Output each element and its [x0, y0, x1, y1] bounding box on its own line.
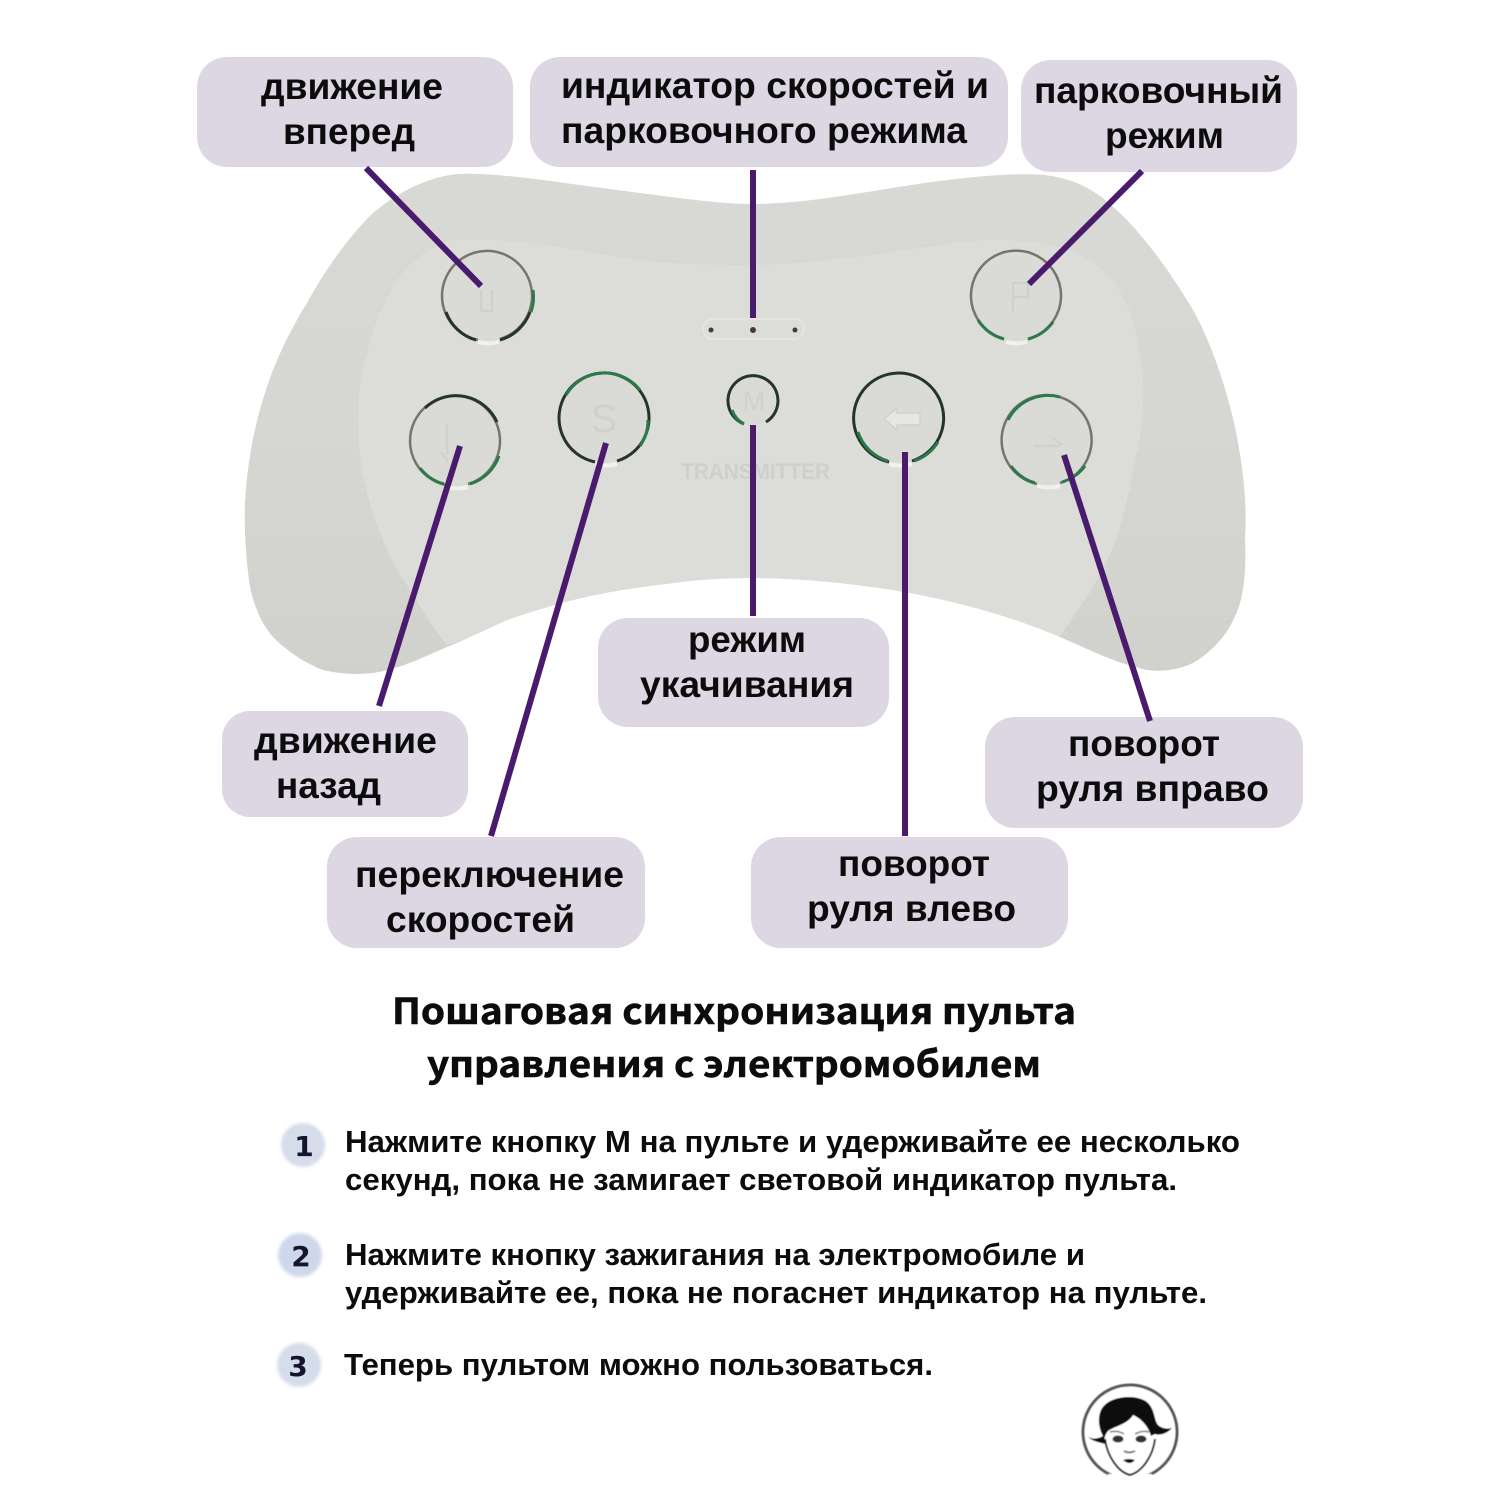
button: mode M: [728, 375, 779, 425]
step 1: [281, 1123, 1240, 1197]
callout: forward: [197, 57, 513, 167]
callout: rocking mode: [598, 618, 889, 727]
callout: steer left: поворот: [838, 843, 990, 884]
callout: indicator: [530, 57, 1008, 167]
button: parking: [971, 251, 1061, 344]
step 2: [278, 1233, 1207, 1310]
callout: backward: назад: [276, 765, 381, 806]
remote texture: [245, 174, 1246, 674]
callout: parking: режим: [1105, 115, 1224, 156]
callout: backward: [222, 711, 468, 817]
step 1 badge: 1: [294, 1130, 314, 1163]
button: speed: S: [591, 397, 617, 441]
step 3 badge: 3: [288, 1350, 308, 1383]
callout: rocking mode: укачивания: [640, 664, 854, 705]
TRANSMITTER label: TRANSMITTER: [681, 459, 830, 484]
button: backward: [410, 396, 501, 488]
remote outer body: [245, 174, 1246, 674]
title: управления с электромобилем: [427, 1036, 1041, 1088]
step 3: [277, 1343, 933, 1387]
step 3 badge: [277, 1343, 321, 1387]
button: steer left: [854, 373, 945, 466]
callout: speed switch: скоростей: [386, 899, 575, 940]
button: speed: [559, 373, 650, 466]
step 1 badge: [281, 1123, 325, 1167]
step 1 text: Нажмите кнопку М на пульте и удерживайте ее несколько: [345, 1125, 1240, 1159]
callout: rocking mode: режим: [688, 619, 806, 660]
leader lines: [366, 168, 1150, 836]
callout: parking: [1021, 60, 1297, 172]
callout: backward: движение: [254, 720, 437, 761]
step 2 badge: [278, 1233, 322, 1277]
callout: parking: парковочный: [1034, 70, 1283, 111]
step 1 text: [345, 1125, 1240, 1197]
callout: speed switch: переключение: [355, 854, 624, 895]
step 2 text: Нажмите кнопку зажигания на электромобиле и: [345, 1238, 1085, 1272]
button: steer right: [1002, 395, 1093, 488]
icon: face logo: [1083, 1385, 1177, 1482]
callout: steer left: [751, 837, 1068, 948]
step 2 text: [345, 1238, 1207, 1310]
step 1 text: секунд, пока не замигает световой индикатор пульта.: [345, 1163, 1177, 1197]
remote face plate: [358, 239, 1143, 645]
title: [392, 983, 1076, 1088]
callout: forward: вперед: [283, 111, 415, 152]
step 2 text: удерживайте ее, пока не погаснет индикатор на пульте.: [345, 1276, 1207, 1310]
callout: forward: движение: [261, 66, 443, 107]
callout: steer left: руля влево: [807, 888, 1016, 929]
callout: steer right: руля вправо: [1036, 768, 1269, 809]
title: Пошаговая синхронизация пульта: [392, 983, 1076, 1035]
callout: speed switch: [327, 837, 645, 948]
step 3 text: Теперь пультом можно пользоваться.: [344, 1348, 933, 1382]
callout: steer right: поворот: [1068, 723, 1220, 764]
panel: remote control: [245, 174, 1246, 674]
step 2 badge: 2: [291, 1240, 311, 1273]
callout: indicator: парковочного режима: [561, 110, 967, 151]
button: forward: [442, 251, 534, 344]
callout: steer right: [985, 717, 1303, 828]
button: mode M: M: [743, 386, 765, 416]
callout: indicator: индикатор скоростей и: [561, 65, 989, 106]
indicator lights: [703, 319, 804, 339]
